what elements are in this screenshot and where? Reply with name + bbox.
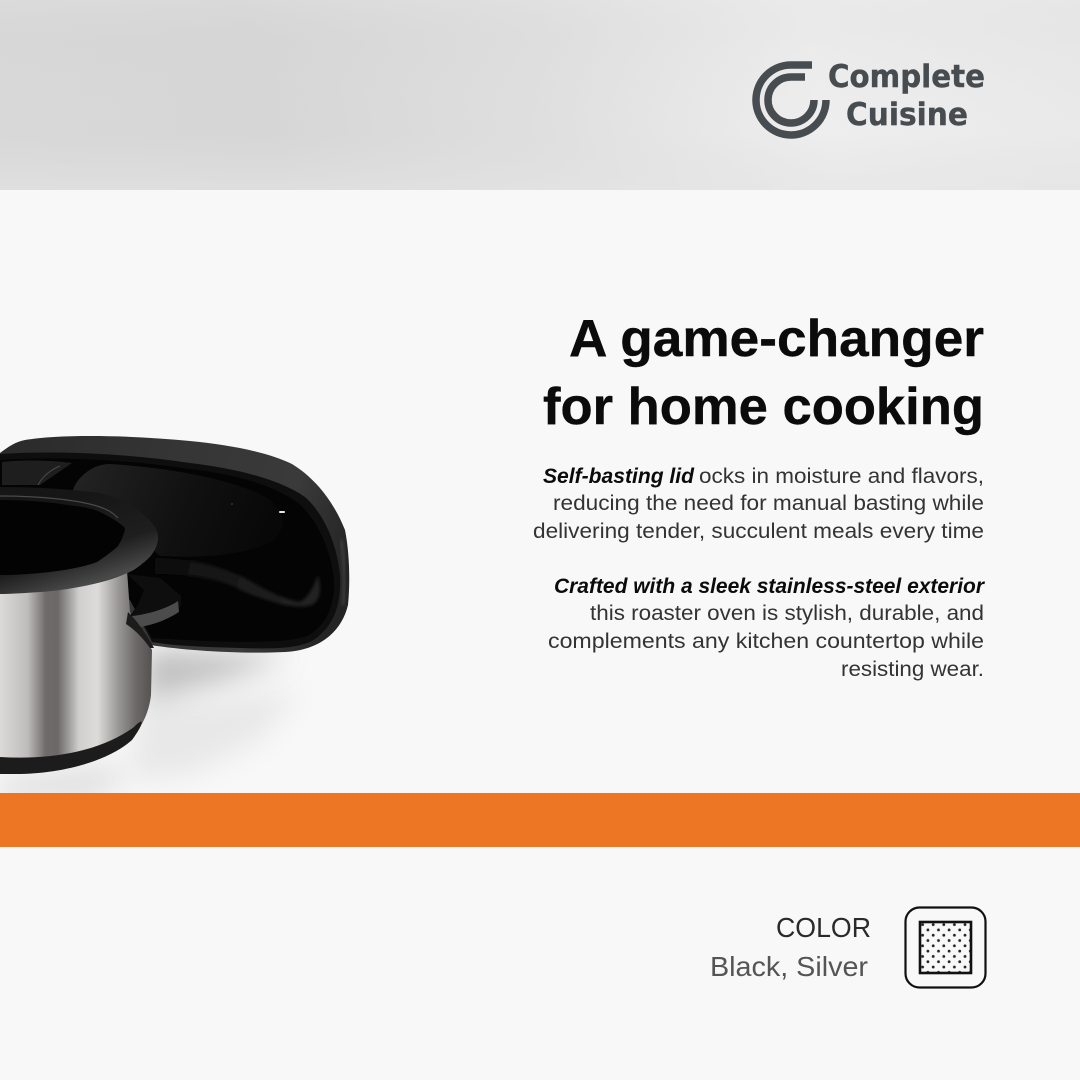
pot opening — [0, 500, 125, 575]
lid inner left panel — [2, 460, 72, 485]
icon: concentric C mark — [756, 65, 826, 135]
text block: stainless-steel exterior — [548, 574, 986, 681]
lid right edge highlight — [341, 540, 344, 605]
color label: COLOR — [776, 912, 871, 943]
logo: Complete Cuisine — [756, 59, 985, 135]
pot hinge — [127, 574, 181, 628]
text block: self-basting lid: Self-basting lid — [543, 464, 695, 488]
text block: stainless-steel exterior: complements any kitchen countertop while — [548, 629, 984, 653]
pot rim — [0, 487, 158, 594]
header band: brushed steel — [0, 0, 1080, 190]
text block: stainless-steel exterior: this roaster oven is stylish, durable, and — [590, 601, 984, 625]
pot rim top lip — [0, 496, 118, 518]
product photo: roaster oven with open lid — [0, 436, 349, 800]
logo wordmark: Cuisine — [846, 97, 968, 133]
lid interior — [0, 458, 334, 642]
lid inner rim — [0, 452, 340, 648]
text block: self-basting lid: ocks in moisture and flavors, — [699, 464, 984, 488]
lid outer shell — [0, 436, 349, 653]
text block: stainless-steel exterior: resisting wear. — [841, 657, 984, 681]
text block: self-basting lid: reducing the need for manual basting while — [553, 491, 984, 515]
text block: stainless-steel exterior: Crafted with a sleek stainless-steel exterior — [554, 574, 986, 598]
lid vent dots — [231, 503, 285, 513]
color label: Black, Silver — [710, 951, 868, 982]
heading: A game-changer — [569, 310, 984, 368]
heading — [543, 310, 984, 436]
lid inner dome — [73, 464, 241, 556]
floor shadow — [0, 650, 300, 800]
lid dome arc — [38, 466, 60, 485]
icon: material swatch — [906, 908, 986, 988]
color label — [710, 912, 871, 982]
hinge lid corner — [126, 612, 154, 648]
logo wordmark: Complete — [828, 59, 985, 95]
text block: self-basting lid — [533, 464, 984, 543]
logo wordmark — [828, 59, 985, 133]
pot body — [0, 570, 152, 773]
lid lower ridge — [155, 558, 320, 607]
text block: self-basting lid: delivering tender, succulent meals every time — [533, 519, 984, 543]
orange band — [0, 793, 1080, 847]
heading: for home cooking — [543, 378, 984, 436]
pot base band — [0, 722, 142, 774]
